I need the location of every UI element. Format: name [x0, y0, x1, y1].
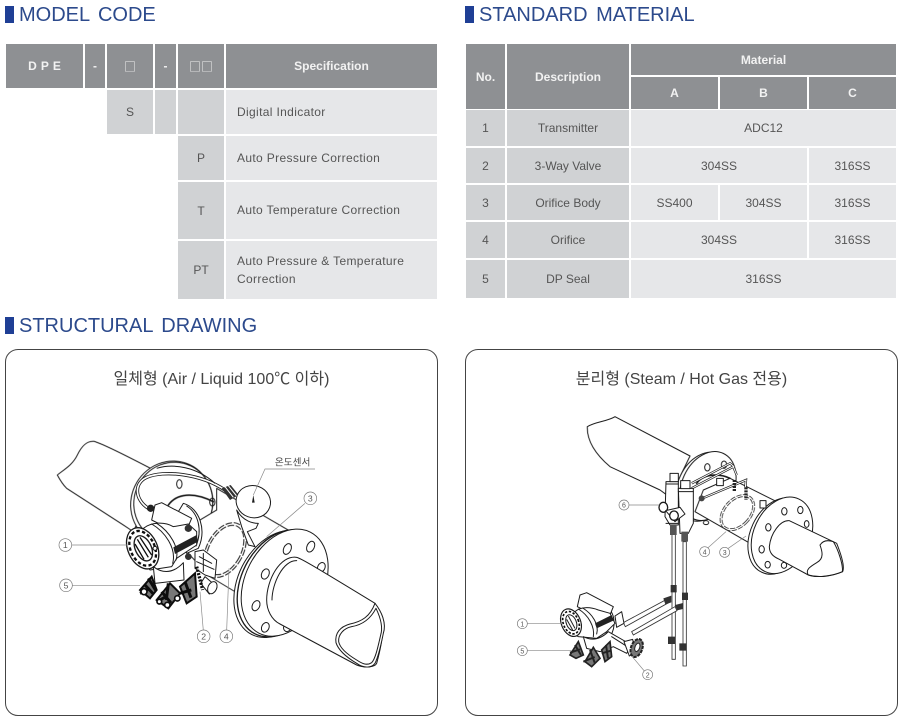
- row: orifice body: Orifice Body: [535, 196, 601, 210]
- temperature sensor gauge: [232, 481, 275, 547]
- row: orifice: 4: [482, 233, 489, 247]
- callout 1: [517, 619, 562, 629]
- row: transmitter: 1: [482, 121, 489, 135]
- row: code header: Specification: [294, 59, 369, 73]
- row: transmitter: [466, 110, 896, 146]
- flange: rear: [117, 447, 227, 559]
- callout 3: [267, 492, 317, 537]
- pipe: upstream section: [57, 441, 160, 532]
- drawing: remote type assembly: [517, 417, 843, 680]
- heading: structural drawing: STRUCTURAL DRAWING: [19, 315, 257, 337]
- row: code header: □: [124, 58, 136, 74]
- callout 1: [59, 539, 127, 551]
- differential pressure transmitter: [120, 503, 202, 574]
- callout 3: 3: [308, 493, 313, 503]
- pipe: middle section: [695, 478, 780, 543]
- callout 5: 5: [520, 648, 524, 655]
- row: 3-way valve: 316SS: [834, 158, 871, 172]
- callout 2: [197, 592, 210, 643]
- row: auto temperature correction: [178, 182, 437, 239]
- drawing: integrated type assembly: [57, 441, 384, 667]
- row: 3-way valve: 2: [482, 158, 489, 172]
- row: auto pressure and temperature correction: Auto Pressure & Temperature: [237, 254, 404, 268]
- row: dp seal: 5: [482, 272, 489, 286]
- row: dp seal: 316SS: [745, 272, 782, 286]
- row: auto pressure correction: [178, 136, 437, 180]
- row: orifice body: SS400: [656, 196, 693, 210]
- row: auto pressure and temperature correction: PT: [193, 263, 209, 277]
- row: material header: A: [670, 86, 679, 100]
- tube: manifold piping: [692, 463, 766, 508]
- pipe: middle section: [188, 488, 297, 597]
- tube: cross connections: [623, 596, 683, 635]
- row: orifice body: 304SS: [745, 196, 782, 210]
- row: auto pressure correction: P: [197, 151, 205, 165]
- row: material header: No.: [476, 70, 495, 84]
- differential pressure transmitter: [557, 593, 632, 653]
- row: 3-way valve: 304SS: [701, 158, 737, 172]
- pipe: downstream section: [769, 521, 843, 577]
- row: dp seal: [466, 260, 896, 298]
- caption: integrated type: 일체형 (Air / Liquid 100℃ 이하): [114, 371, 329, 388]
- callout 1: 1: [63, 540, 68, 550]
- callout 2: 2: [646, 672, 650, 679]
- callout 1: 1: [520, 621, 524, 628]
- row: orifice body: 3: [482, 196, 489, 210]
- row: orifice: 316SS: [834, 233, 871, 247]
- row: digital indicator: Digital Indicator: [237, 105, 326, 119]
- callout 2: [632, 656, 653, 680]
- row: orifice: 304SS: [701, 233, 737, 247]
- panel: remote type: [465, 349, 898, 716]
- callout 3: 3: [723, 550, 727, 557]
- dp seal valves: [570, 642, 612, 667]
- dp seal valves: [140, 573, 197, 608]
- callout 5: [60, 579, 140, 592]
- panel: integrated type: [5, 349, 438, 716]
- orifice dashed ring: [195, 515, 255, 585]
- callout 6: [619, 500, 659, 510]
- row: transmitter: Transmitter: [538, 121, 598, 135]
- row: 3-way valve: [466, 148, 896, 183]
- 3-way valve block: [659, 473, 693, 533]
- row: material header: C: [848, 86, 857, 100]
- row: auto pressure and temperature correction: [178, 241, 437, 299]
- table: standard material: [466, 44, 896, 298]
- row: material header: Material: [741, 52, 786, 66]
- callout 2: 2: [201, 631, 206, 641]
- flange: front: [736, 487, 825, 584]
- row: code header: DPE: [28, 59, 65, 73]
- row: auto pressure and temperature correction: Correction: [237, 272, 296, 286]
- caption: remote type: 분리형 (Steam / Hot Gas 전용): [576, 371, 787, 388]
- row: 3-way valve: 3-Way Valve: [535, 158, 601, 172]
- flange: front: [217, 514, 345, 652]
- row: auto temperature correction: Auto Temperature Correction: [237, 203, 400, 217]
- callout 5: 5: [64, 580, 69, 590]
- orifice dashed ring: [713, 488, 762, 537]
- callout 4: 4: [224, 631, 229, 641]
- callout 4: [700, 532, 726, 557]
- row: code header: [6, 44, 437, 88]
- row: auto pressure correction: Auto Pressure Correction: [237, 151, 380, 165]
- callout 4: [220, 568, 233, 643]
- row: orifice: Orifice: [551, 233, 585, 247]
- row: material header: [466, 44, 896, 109]
- row: material header: B: [759, 86, 768, 100]
- pipe: downstream section: [267, 557, 384, 667]
- row: auto temperature correction: T: [197, 204, 205, 218]
- 3-way valve handle: [624, 637, 645, 659]
- table: model code: [6, 44, 437, 299]
- row: orifice body: [466, 185, 896, 220]
- row: material header: Description: [535, 70, 601, 84]
- row: orifice body: 316SS: [834, 196, 871, 210]
- row: code header: □□: [189, 58, 213, 74]
- row: transmitter: ADC12: [744, 121, 783, 135]
- callout 5: [517, 646, 572, 656]
- label: temperature sensor: 온도센서: [275, 458, 310, 469]
- row: digital indicator: S: [126, 105, 134, 119]
- callout 3: [720, 536, 746, 557]
- row: code header: -: [164, 59, 168, 73]
- flange: rear: [665, 442, 747, 530]
- tube: impulse line: [137, 466, 239, 508]
- row: dp seal: DP Seal: [546, 272, 590, 286]
- row: orifice: [466, 222, 896, 258]
- heading: standard material: STANDARD MATERIAL: [479, 4, 695, 26]
- row: digital indicator: [107, 90, 437, 134]
- pipe: upstream section: [587, 417, 690, 497]
- tube: vertical lines: [668, 525, 688, 666]
- row: code header: -: [93, 59, 97, 73]
- heading: model code: MODEL CODE: [19, 4, 156, 26]
- label: temperature sensor: [253, 458, 315, 495]
- callout 4: 4: [703, 549, 707, 556]
- callout 6: 6: [622, 503, 626, 510]
- bracket and manifold: [153, 550, 219, 595]
